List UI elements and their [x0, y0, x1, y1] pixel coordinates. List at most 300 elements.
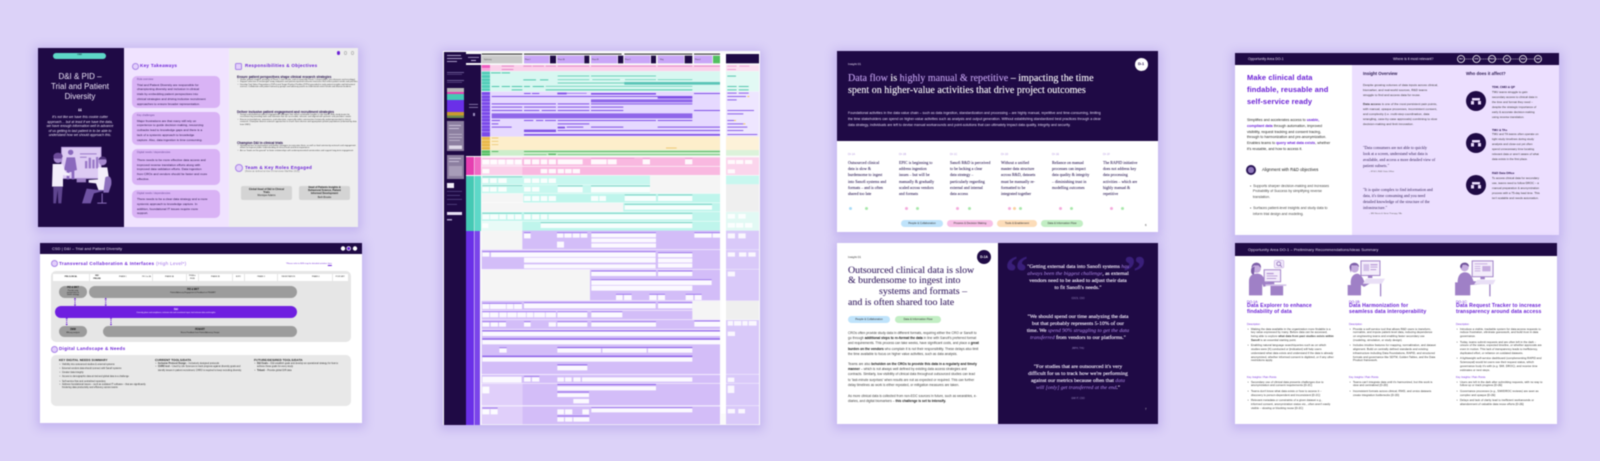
list: key digital needs: External vendors data should connect with Sanofi systems — [62, 368, 121, 370]
page number: 7 — [1145, 407, 1147, 411]
column: DI-1C: data access — [950, 191, 968, 196]
column: DI-1A: shared too late — [848, 191, 871, 196]
phase: EOP2: EOP2 — [236, 276, 241, 278]
column: DI-1B: EPIC is beginning to — [899, 160, 932, 165]
column: DI-1F: activities – which are — [1103, 179, 1137, 184]
text: TMU and TAs: relevant data or aren't aware of what — [1492, 152, 1539, 156]
insights bullets B: Teams can't integrate data until it's harmonized, but this work is slow and centralized [D-2D] — [1353, 380, 1432, 387]
swimlane: DMM — [59, 326, 87, 337]
column: DO-1A: findability of data — [1247, 309, 1292, 315]
column: DO-1C: DO-1C: — [1456, 300, 1468, 304]
card: key challenges: capture. Also, data ingestion is time consuming. — [137, 138, 202, 142]
quote 2: "It is quite complex to find information and — [1363, 186, 1433, 192]
phase: phase 3 — [245, 274, 277, 281]
text: data office: manual preparation & anonymization — [1492, 186, 1539, 190]
column: DI-1A: into Sanofi systems and — [848, 179, 886, 184]
list: key digital needs: Self-service flow and centralized repository — [62, 381, 106, 383]
column: DI-1E: DI-1E — [1052, 152, 1059, 156]
card: digital dependencies 1: improved reverse translation efforts along with — [137, 163, 200, 167]
card: digital dependencies 1 — [132, 149, 220, 185]
column: DI-1D — [1000, 152, 1036, 196]
column: DI-1A — [847, 152, 887, 196]
stage chain: ANA — [1521, 58, 1526, 61]
quote 1 — [1362, 144, 1436, 168]
text: data office: use, teams need to follow DROC – a — [1492, 181, 1539, 185]
swimlane: PEMART: PEMART — [195, 329, 205, 331]
heading: who does it affect: Who does it affect? — [1466, 71, 1506, 76]
column: DO-1B: seamless data interoperability — [1349, 309, 1426, 315]
list: key digital needs — [58, 358, 146, 389]
paragraph 2: contracts. Similarly, low visibility of clinical data throughout outsourced studies can lead — [848, 372, 975, 376]
phase: phase 1 — [105, 274, 140, 281]
pagination dots — [336, 50, 354, 56]
text: deliver patient engagement: Deliver inclusive patient engagement and recruitment strategies — [237, 110, 334, 114]
attribution 3: GMI IT, CSO — [1071, 397, 1085, 400]
column: DO-1C: Data Request Tracker to increase — [1456, 303, 1541, 309]
headline: Data flow is highly manual & repetitive – impacting the time — [848, 72, 1094, 84]
paragraph 2 — [847, 362, 978, 388]
quote text: of us getting to last patient in to be able to — [49, 128, 111, 132]
text: champion D&I: Identify barriers to participation and define strategies to overcome them, as well as lead community outreach and engagement efforts to improve public understanding of clinical trials and their importance — [240, 145, 356, 149]
text: champion D&I — [236, 140, 356, 152]
column: DO-1A — [1247, 300, 1335, 316]
map labels: Phase 4 — [695, 59, 701, 61]
intro text — [847, 110, 1102, 128]
quote 1 — [1026, 263, 1130, 291]
icon: collaboration — [51, 260, 58, 267]
illustration: clinicians reviewing data on a screen — [51, 146, 112, 204]
insights bullets C — [1456, 380, 1543, 408]
list: key digital needs: Address foundational issues – such as outdated IT software – that are significantly hindering data productivity and efficiency across teams — [62, 384, 146, 389]
tag: people and collaboration — [848, 316, 890, 323]
column: DI-1B — [898, 152, 934, 196]
badge — [977, 250, 991, 264]
overview text: Despite growing volumes of data inputs across clinical, — [1363, 83, 1438, 87]
map labels: Phase 2A — [558, 58, 565, 61]
quote 2: detailed knowledge of the structure of the — [1363, 198, 1430, 204]
column: DI-1A: data is slow & — [848, 166, 871, 171]
alignment bullets: inform trial design and modeling. — [1253, 212, 1304, 216]
heading: key takeaways: Key Takeaways — [140, 63, 177, 68]
headline: self-service ready — [1247, 97, 1312, 106]
footnote: *Please refer to E2E map for detailed activities here — [286, 262, 332, 264]
quote text: approach… but at least if we have the data, — [47, 120, 113, 124]
paragraph 1: CROs often provide study data in different formats, requiring either the CRO or Sanofi to — [848, 330, 977, 334]
overview text: with manual, opaque processes, inconsistent consent, — [1363, 107, 1437, 111]
swimlane: D&I — [55, 306, 297, 318]
map labels: Phase 3 — [625, 59, 631, 61]
list: future tools — [253, 358, 338, 372]
title: D&I & PID – — [58, 72, 102, 80]
swimlane: PID and MKT pre-clinical — [59, 286, 87, 298]
role box: head of patients insights: Behavioral Science, Patient — [308, 189, 341, 192]
role box: head of patients insights: Beth Brooks — [318, 196, 331, 199]
column: DI-1C: external and internal — [950, 185, 983, 190]
column: DI-1E: – diminishing trust in — [1052, 179, 1086, 184]
phase: 2A to 2B — [187, 274, 198, 281]
column: DI-1A: burdensome to ingest — [848, 172, 882, 177]
column: DI-1D: master data structure — [1001, 166, 1034, 171]
swimlane: D&I: D&I — [174, 309, 178, 311]
summary paragraph: Enables teams to query what data exists, whether — [1247, 141, 1330, 145]
overview text: decision-making and limit innovation. — [1363, 122, 1414, 126]
text: data office: R&D Data Office — [1492, 171, 1514, 175]
illustration: person with data screen — [1347, 259, 1386, 297]
overview text: and complexity (i.e. multi-step coordination, data — [1363, 112, 1429, 116]
column: DI-1F: data processing — [1103, 172, 1128, 177]
quote 3: will [only] get transferred at the end." — [1036, 385, 1120, 391]
summary paragraph: it's reusable, and how to access it. — [1247, 147, 1302, 151]
insights bullets C: Users are left in the dark after submitting requests, with no way to follow up or track progress [D-2E] — [1460, 380, 1543, 387]
text: ensure patient perspectives: Ensure patient perspectives shape clinical research strategies — [237, 75, 331, 79]
text: TDM group: the time and format they need – — [1492, 100, 1533, 104]
card: digital dependencies 1: Digital needs / dependencies — [137, 151, 170, 154]
legend: people and collaboration: People & Collaboration — [908, 222, 936, 225]
panel: insight 01 overview slide — [837, 51, 1158, 232]
swimlane: PEMART — [103, 326, 297, 337]
card: digital dependencies 2: Digital needs / dependencies — [137, 192, 170, 195]
quote 1: patient subsets." — [1363, 162, 1389, 168]
insights bullets A: Relevant metadata or constraints of a given dataset e.g., informed consent, anonymization status etc., often aren't easily visible – slowing or blocking reuse [D-2C] — [1251, 398, 1330, 410]
header bar — [1235, 53, 1559, 65]
column: DI-1B: issues – but will be — [899, 172, 930, 177]
card: role overview: approaches to ensure broader representation. — [137, 102, 200, 106]
paragraph 1: the time available to focus on higher value activities, such as data analysis. — [848, 352, 957, 356]
header title: CSD | D&I – Trial and Patient Diversity — [52, 246, 122, 251]
phase: registration: REGISTRATION — [282, 276, 295, 278]
role box: head of patients insights — [299, 186, 350, 200]
column: DO-1A: DO-1A: — [1247, 300, 1258, 304]
text: TMU and TAs: analysis and close-out yet often — [1492, 142, 1532, 146]
phase: pre-clinical — [53, 274, 89, 281]
overview text: Data access is one of the most persistent pain points, — [1363, 102, 1437, 106]
heading: team and key roles: Team & Key Roles Engaged — [245, 165, 312, 170]
description bullets A: Enabling natural language search/queries such as on which studies were [X] conducted or [indication] will help users understand what data exists and understand if the data is already anonymized, whether informed consent is digitized, or if any other restrictions apply. — [1251, 343, 1334, 362]
list: current tools: CURRENT TOOLS/DATA — [155, 358, 191, 362]
quote 1: vendors need to be asked to adjust their data — [1029, 278, 1127, 284]
icon: alignment — [1246, 165, 1256, 175]
phase: 2A to 2B: PH2A to — [189, 275, 196, 277]
panel: dark title column — [38, 48, 124, 227]
upper activity grid — [482, 54, 720, 156]
headline: & burdensome to ingest into — [848, 275, 960, 286]
column: DO-1B: Data Harmonization for — [1349, 303, 1408, 309]
quote 1: available, and access a more detailed view of — [1363, 156, 1435, 162]
text: TMU and TAs: TMU and TA teams often operate on — [1492, 132, 1538, 136]
text: TDM group: using reverse translation. — [1492, 115, 1524, 119]
header question: Where is it most relevant? — [1393, 57, 1433, 61]
column: DI-1C — [949, 152, 991, 196]
insights bullets A — [1247, 380, 1334, 412]
icon: TMU and TAs — [1466, 133, 1486, 153]
panel: white left column — [1235, 53, 1352, 235]
quote mark close: ” — [1123, 246, 1146, 297]
tag pill: CSD — [77, 54, 82, 56]
paragraph 1: go through additional steps to re-format the data in line with Sanofi's preferred format — [848, 336, 976, 340]
page number: 6 — [1145, 223, 1147, 227]
card: digital dependencies 2: systemic approach to knowledge capture. In — [137, 202, 197, 206]
card: key challenges — [132, 112, 220, 145]
card: role overview: Role overview — [137, 78, 153, 81]
description bullets B — [1349, 328, 1436, 365]
paragraph 2: manner – which is not always well defined by existing data access strategies and — [848, 367, 967, 371]
insights bullets A: Secondary use of clinical data presents challenges due to anonymization and consent requirements [D-2C] — [1251, 380, 1324, 387]
title: Diversity — [65, 92, 95, 101]
quote 2 attribution: – MS Neuro & Gene Therapy, TAs — [1369, 213, 1402, 215]
phase: phase 2A — [153, 274, 186, 281]
insights bullets C: Delays and lack of clarity lead to inefficient workarounds or abandonment of valuable data reuse efforts [D-2E] — [1460, 398, 1534, 406]
text: TMU and TAs: tight study timelines during study — [1492, 137, 1534, 141]
alignment bullets — [1250, 184, 1330, 216]
icon: takeaways — [132, 63, 139, 70]
headline: Make clinical data — [1247, 73, 1313, 82]
overview text — [1362, 83, 1438, 126]
column: DI-1A: DI-1A — [848, 152, 855, 156]
panel: preliminary recommendations slide — [1235, 243, 1557, 424]
phase: phase 1: PHASE 1 — [119, 276, 127, 278]
header bar — [1235, 243, 1557, 256]
column: DI-1E: modelling outcomes — [1052, 185, 1085, 190]
label: Insight 01 — [848, 255, 861, 259]
text: data office — [1491, 171, 1540, 200]
quote 1: "Getting external data into Sanofi systems has — [1027, 264, 1129, 270]
stage chain: STD — [1474, 59, 1479, 61]
heading: insight overview: Insight Overview — [1363, 71, 1397, 76]
card: role overview: Trial and Patient Diversity are responsible for — [137, 83, 199, 87]
list: key digital needs: Access to demographic data at trial and global data is a challenge — [62, 376, 129, 378]
summary paragraph: through to harmonization and pre-anonymization. — [1247, 135, 1326, 139]
legend: data and information flow — [1041, 220, 1083, 227]
intro text: Foundational activities in the data value chain – such as data ingestion, standardization and processing – are highly manual, repetitive and time-consuming, limiting — [848, 110, 1101, 114]
summary paragraph: compliant data through automation, improved — [1247, 124, 1322, 128]
column: DI-1C: data strategy – — [950, 172, 973, 177]
insights label A: Key Insights / Pain Points — [1247, 376, 1276, 378]
tag: data and information flow — [895, 316, 941, 323]
summary paragraph: visibility, request tracking and consent tracing, — [1247, 130, 1321, 134]
legend: data and information flow: Data & Information Flow — [1048, 222, 1076, 225]
column: DI-1E: data quality & integrity — [1052, 172, 1089, 177]
column: DI-1C: DI-1C — [950, 152, 957, 156]
column: DI-1F: repetitive — [1103, 191, 1118, 196]
card: role overview: championing diversity and inclusion in clinical — [137, 87, 199, 91]
swimlane: PID and MKT pre-clinical: Provide early — [68, 290, 78, 292]
phase: post market: POST-MKT — [336, 276, 345, 278]
text: ensure patient perspectives: Develop Trial Value Propositions (TVPs) and Target Product Profiles (TPPs) grounded in early patient insights and behavioral science; Collaborate with patient advocacy groups and advisory panels to understand unmet needs and disease burdens — [240, 84, 355, 88]
quote mark: “ — [78, 107, 82, 117]
column: DI-1F: highly manual & — [1103, 185, 1130, 190]
text: TMU and TAs: spend unnecessary time locating — [1492, 147, 1534, 151]
illustration: person with request tracker — [1455, 259, 1496, 297]
swimlane: DMM: Efficacy analysis — [66, 332, 80, 334]
overview text: biomarker, and real-world sources, R&D teams — [1363, 88, 1427, 92]
swimlane: PID and MKT — [89, 286, 297, 298]
quote 1: always been the biggest challenge, as external — [1027, 271, 1129, 277]
phase: phase 1 to 2A: PH 1 to 2A — [142, 276, 151, 278]
quote 2: transferred from vendors to our platforms." — [1030, 335, 1126, 341]
alignment bullets: translation. — [1253, 195, 1270, 199]
description bullets C: A lightweight self-service dashboard (complementing RAPID and Sciencepal) would let users see their request status, which governance body it's with (e.g. SMI, DROC), and receive time estimates or next steps. — [1460, 356, 1541, 372]
headline: spent on higher-value activities that drive project outcomes — [848, 85, 1086, 96]
insights label C: Key Insights / Pain Points — [1456, 376, 1485, 378]
phase: phase 2A: PHASE 2A — [165, 276, 174, 278]
text: TDM group: TDM, CMEI & QP — [1492, 85, 1515, 89]
role box: global head: Trials — [263, 191, 270, 194]
quote 2: "We should spend our time analyzing the data — [1028, 314, 1128, 320]
insights bullets B — [1349, 380, 1436, 399]
swimlane: PEMART: Shares Feedback from Patient Advocacy Groups — [181, 332, 219, 334]
phase: EOP2 — [233, 274, 244, 281]
quote 3: against our metrics because often that data — [1031, 378, 1125, 384]
card: digital dependencies 2: support. — [137, 211, 148, 215]
text: ensure patient perspectives: Gather patient insights, primarily in Phase 2 and 3 trials, and occasionally Phase 1 (especially in rare diseases and oncology) — [240, 79, 355, 81]
header title: Opportunity Area DO-1 – Preliminary Recommendations/Ideas Summary — [1248, 247, 1378, 252]
tag pill — [53, 53, 106, 58]
header label: Opportunity Area DO-1 — [1248, 57, 1284, 61]
stage chain: INT — [1505, 59, 1509, 61]
map labels: Phase 1 — [525, 59, 531, 61]
text: data office: process with a 75-day lead time. This — [1492, 191, 1540, 195]
overview text: wrangling, case-by-case approvals) combining to slow — [1363, 117, 1437, 121]
attribution 1: CDCS, CSO — [1071, 297, 1085, 300]
icon: digital landscape — [51, 346, 58, 352]
card: digital dependencies 1: improved data validation efforts. Data ingestion — [137, 167, 201, 171]
column: DI-1C: Sanofi R&D is perceived — [950, 160, 990, 165]
badge: D-1A — [980, 254, 988, 258]
card: role overview: clinical strategies and driving inclusive recruitment — [137, 97, 206, 101]
card: role overview — [132, 76, 220, 108]
role box: global head: Monique Adams — [258, 194, 275, 197]
column: DI-1E — [1051, 152, 1090, 191]
panel: opportunity area DO-1 slide — [1235, 53, 1559, 235]
paragraph 1: and requirements. This process can take weeks, have significant costs, and place a great — [848, 341, 979, 345]
column: DI-1F: does not address key — [1103, 166, 1136, 171]
phase: IND — [90, 274, 104, 281]
quote 2 — [1026, 314, 1130, 341]
top-left stage column and section spines — [466, 54, 481, 425]
swimlane: PID and MKT pre-clinical: perspectives to — [67, 292, 79, 294]
text: deliver patient engagement: Ensure inclusivity/trust, awareness, and education, especially within communities historically underrepresented in clinical research; Champion diverse outreach approaches to reach more diverse and appropriate patient populations (informed by data from DMO) — [240, 119, 357, 126]
text: champion D&I: Champion D&I in clinical trials — [237, 141, 283, 145]
column: DI-1D: integrated together — [1001, 191, 1031, 196]
phase: phase 2B: PHASE 2B — [211, 276, 220, 278]
role box: global head: Global Head of D&I in Clinical — [249, 188, 284, 190]
column: DI-1B: scaled across vendors — [899, 185, 934, 190]
list: current tools — [154, 358, 242, 372]
icon: TDM group — [1466, 91, 1486, 111]
text: TDM group: TMU teams struggle to gain — [1492, 90, 1528, 94]
category dots — [848, 206, 1124, 210]
purple sections — [482, 231, 720, 424]
icon: data office — [1466, 175, 1486, 195]
text: TDM group — [1492, 85, 1538, 119]
map labels: Phase 2B — [592, 59, 599, 61]
column: DO-1A: Data Explorer to enhance — [1247, 303, 1312, 309]
card: key challenges: cutbacks lead to knowledge gaps and there is a — [137, 128, 202, 132]
panel: key takeaways column — [124, 48, 229, 227]
insights bullets B: Inconsistent formats across clinical, RWD, and omics datasets create integration bottlenecks [D-2D] — [1353, 389, 1431, 397]
phase: IND: IND/ — [95, 275, 99, 277]
map labels — [484, 58, 701, 61]
swimlane: PID and MKT pre-clinical: PID & MKT — [67, 287, 79, 289]
swimlane: DMM: DMM — [70, 329, 76, 331]
column: DI-1D: must be manually re- — [1001, 179, 1035, 184]
column: DI-1F: DI-1F — [1103, 152, 1110, 156]
quote text: we have enough information well in advance — [47, 124, 113, 128]
header bar — [40, 243, 362, 254]
legend: process and decision making: Process & Decision Making — [954, 222, 986, 225]
quote 2: infrastructure." — [1363, 204, 1387, 210]
description bullets C: Introduce a visible, trackable system for data access requests to reduce frustration, eliminate guesswork, and build trust in data governance. — [1460, 326, 1541, 338]
card: key challenges: lack of a systemic approach to knowledge — [137, 133, 194, 137]
column: DI-1D: DI-1D — [1001, 152, 1008, 156]
icon: team — [235, 164, 243, 172]
headline — [1246, 73, 1329, 106]
insights bullets A: Teams don't know what data exists or how to access it – discovery is person-dependent and inconsistent [D-2C] — [1251, 389, 1322, 397]
quote 1: look at a screen, understand what data is — [1363, 150, 1428, 156]
label: Insight 01 — [848, 62, 861, 66]
stage chain: PROC — [1489, 59, 1495, 61]
swimlane: PID and MKT: Patient Advocacy Engagement & Feedback on PID&MKT — [170, 292, 216, 294]
list: key digital needs: KEY DIGITAL NEEDS SUMMARY — [59, 358, 108, 362]
heading: responsibilities and objectives: Responsibilities & Objectives — [245, 63, 317, 68]
intro text: the time stakeholders can spend on higher-value activities such as analysis and output generation. Without establishing standardized best practices through a clear — [848, 117, 1101, 121]
list: future tools: Trikard – Provide global D/R data — [257, 370, 291, 372]
swimlane: D&I: Diversity plans and compliance, inclusive site and recruitment input, trial inclusive data and insights — [137, 312, 215, 314]
headline: and is often shared too late — [848, 297, 954, 308]
paragraph 3: diaries, and digital biomarkers – this challenge is set to intensify. — [848, 399, 946, 403]
paragraph 2: to 'last-minute surprises' when results are not as expected or required. This can further — [848, 378, 974, 382]
text: TDM group: secondary access to clinical data in — [1492, 95, 1537, 99]
column: DI-1B: address ingestion — [899, 166, 927, 171]
description bullets A: Making the data available in the organization more findable is a key value expressed by many. Before data can be accessed, being able to explore what data from past studies exists within Sanofi is an essential starting point. — [1251, 326, 1334, 342]
overview text: struggle to find and access data for reuse. — [1363, 93, 1421, 97]
headline — [848, 264, 974, 308]
list: current tools: CHRO tool – Used by Life Sciences to track progress against diversity goals and identify issues in patient recruitment; CHRO is required to keep recruiting diversity — [158, 366, 241, 372]
card: digital dependencies 2 — [132, 190, 220, 218]
role box: head of patients insights: Informed Development — [311, 192, 338, 195]
column: DI-1D: across R&D, datasets — [1001, 172, 1035, 177]
right-hand legend block — [721, 54, 759, 414]
phase: IND: PRE-IND — [93, 278, 101, 280]
description bullets C — [1456, 328, 1543, 374]
text: deliver patient engagement — [236, 110, 357, 126]
list: key digital needs: Visibility into outsourced studies & external systems — [62, 364, 115, 366]
column: DI-1F — [1102, 152, 1138, 196]
heading: transversal collaboration: Transversal Collaboration & Interfaces (High Level*) — [59, 260, 186, 266]
summary paragraph: Simplifies and accelerates access to usable, — [1247, 118, 1319, 122]
description bullets C: Today, teams submit requests and are often left in the dark – unsure of the status, expected timeline, or whether approvals are even in motion. This lack of transparency leads to inefficiency, duplicated effort, or reliance on outdated datasets. — [1460, 340, 1542, 355]
role box: head of patients insights: Head of Patients Insights & — [308, 186, 341, 189]
illustration: person with search magnifier — [1247, 259, 1287, 297]
text: deliver patient engagement: Design and implement patient engagement strategies that reflect actionable insights in site teams; Help study teams be recruitment by providing tools and materials that are accessible, relevant, and aligned with patients' and providers' needs — [240, 114, 351, 118]
phase: phase 3: PHASE 3 — [257, 276, 265, 278]
column: DI-1E: processes can impact — [1052, 166, 1086, 171]
description label B: Description — [1349, 322, 1362, 326]
text: data office: To access clinical data for secondary — [1492, 176, 1539, 180]
alignment heading: Alignment with R&D objectives — [1262, 167, 1318, 172]
paragraph 1: burden on the vendors who complain it is not their responsibility. These delays also limit — [848, 347, 978, 351]
text: data office: isn't scalable and needs automation. — [1492, 196, 1539, 200]
legend: people and collaboration — [901, 220, 943, 227]
panel: dark quotes — [998, 243, 1158, 424]
map labels: Filing — [660, 59, 664, 61]
headline: Outsourced clinical data is slow — [848, 264, 974, 276]
card: key challenges: Key challenges — [137, 114, 155, 117]
icon: responsibilities — [235, 63, 242, 70]
phase: registration — [278, 274, 299, 281]
badge — [1134, 58, 1148, 70]
panel: insight D-1A slide — [837, 243, 1158, 424]
